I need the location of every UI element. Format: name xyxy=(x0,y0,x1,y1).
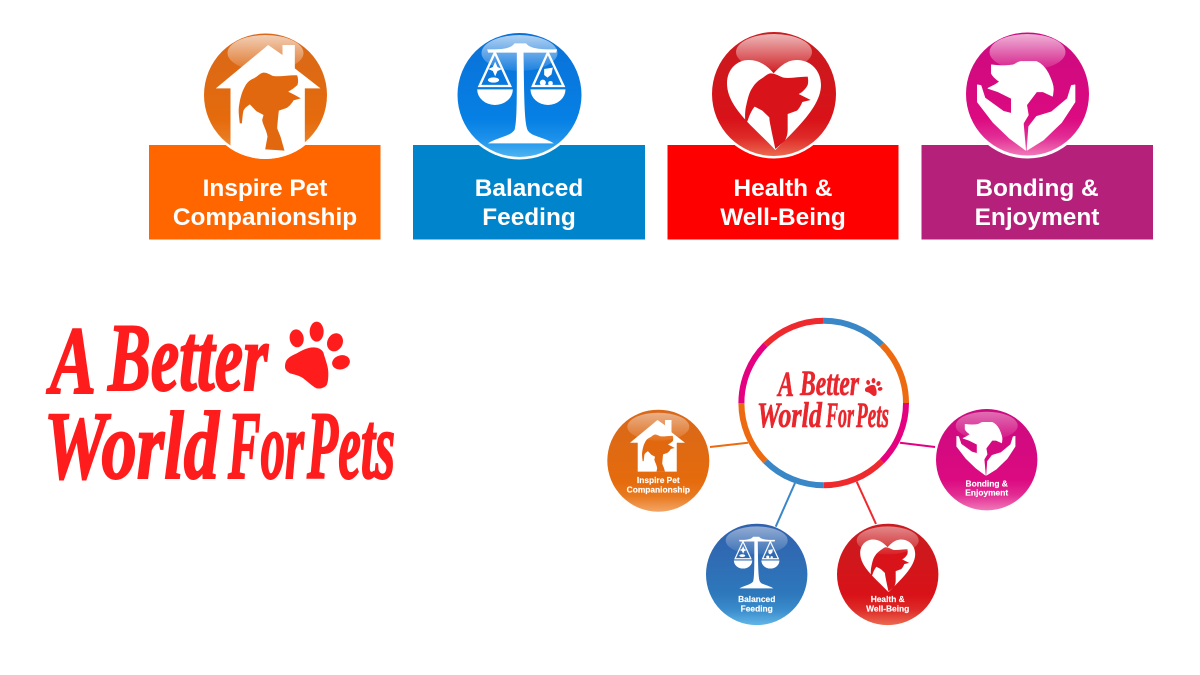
node: Balanced Feeding: Balanced xyxy=(738,594,775,604)
node: Inspire Pet Companionship: Companionship xyxy=(627,485,690,495)
icon: heart with dog xyxy=(710,30,838,158)
hub title: World xyxy=(757,395,823,435)
label box: purple xyxy=(922,145,1153,240)
hub title: Pets xyxy=(855,395,889,435)
label box: purple: Bonding & xyxy=(975,175,1099,202)
hub title xyxy=(757,363,889,435)
title: A Better World For Pets: Pets xyxy=(306,392,395,499)
label box: red xyxy=(668,145,898,240)
hub title: For xyxy=(826,395,854,435)
title: A Better World For Pets: World xyxy=(44,392,220,499)
icon: balance scale xyxy=(455,30,584,160)
label box: orange xyxy=(149,145,380,240)
label box: orange: Companionship xyxy=(173,204,357,231)
hub title: Better xyxy=(799,363,860,403)
icon: hub paw xyxy=(865,378,883,396)
node: Bonding and Enjoyment: Bonding & xyxy=(966,479,1008,489)
node: Balanced Feeding: Feeding xyxy=(741,603,773,613)
node: Bonding and Enjoyment: Enjoyment xyxy=(965,488,1008,498)
label box: blue: Balanced xyxy=(475,175,583,202)
label box: orange: Inspire Pet xyxy=(203,175,327,202)
label box: blue: Feeding xyxy=(482,204,576,231)
panel: central hub ring xyxy=(741,321,906,485)
node: Health and Well-Being xyxy=(837,524,938,625)
node: Health and Well-Being: Health & xyxy=(871,594,905,604)
node: Balanced Feeding xyxy=(706,524,807,625)
label box: blue xyxy=(413,145,645,240)
label box: red: Well-Being xyxy=(720,204,846,231)
icon: house with dog xyxy=(202,31,330,162)
panel: Bonding and Enjoyment xyxy=(922,30,1153,240)
label box: red: Health & xyxy=(734,175,832,202)
title: A Better World For Pets: For xyxy=(227,392,305,499)
connector lines xyxy=(710,443,935,527)
icon: paw print xyxy=(285,322,351,389)
panel: Health and Well-Being xyxy=(668,30,898,240)
title: A Better World For Pets: A xyxy=(46,307,96,414)
node: Inspire Pet Companionship xyxy=(607,410,709,512)
node: Health and Well-Being: Well-Being xyxy=(866,603,909,613)
node: Bonding and Enjoyment xyxy=(936,409,1037,510)
label box: purple: Enjoyment xyxy=(975,204,1099,231)
title: A Better World For Pets xyxy=(44,304,395,499)
panel: Balanced Feeding xyxy=(413,30,645,240)
title: A Better World For Pets: Better xyxy=(107,304,269,411)
node: Inspire Pet Companionship: Inspire Pet xyxy=(637,475,680,485)
icon: hands holding dog xyxy=(963,30,1092,158)
hub title: A xyxy=(777,364,794,404)
panel: Inspire Pet Companionship xyxy=(149,31,380,240)
